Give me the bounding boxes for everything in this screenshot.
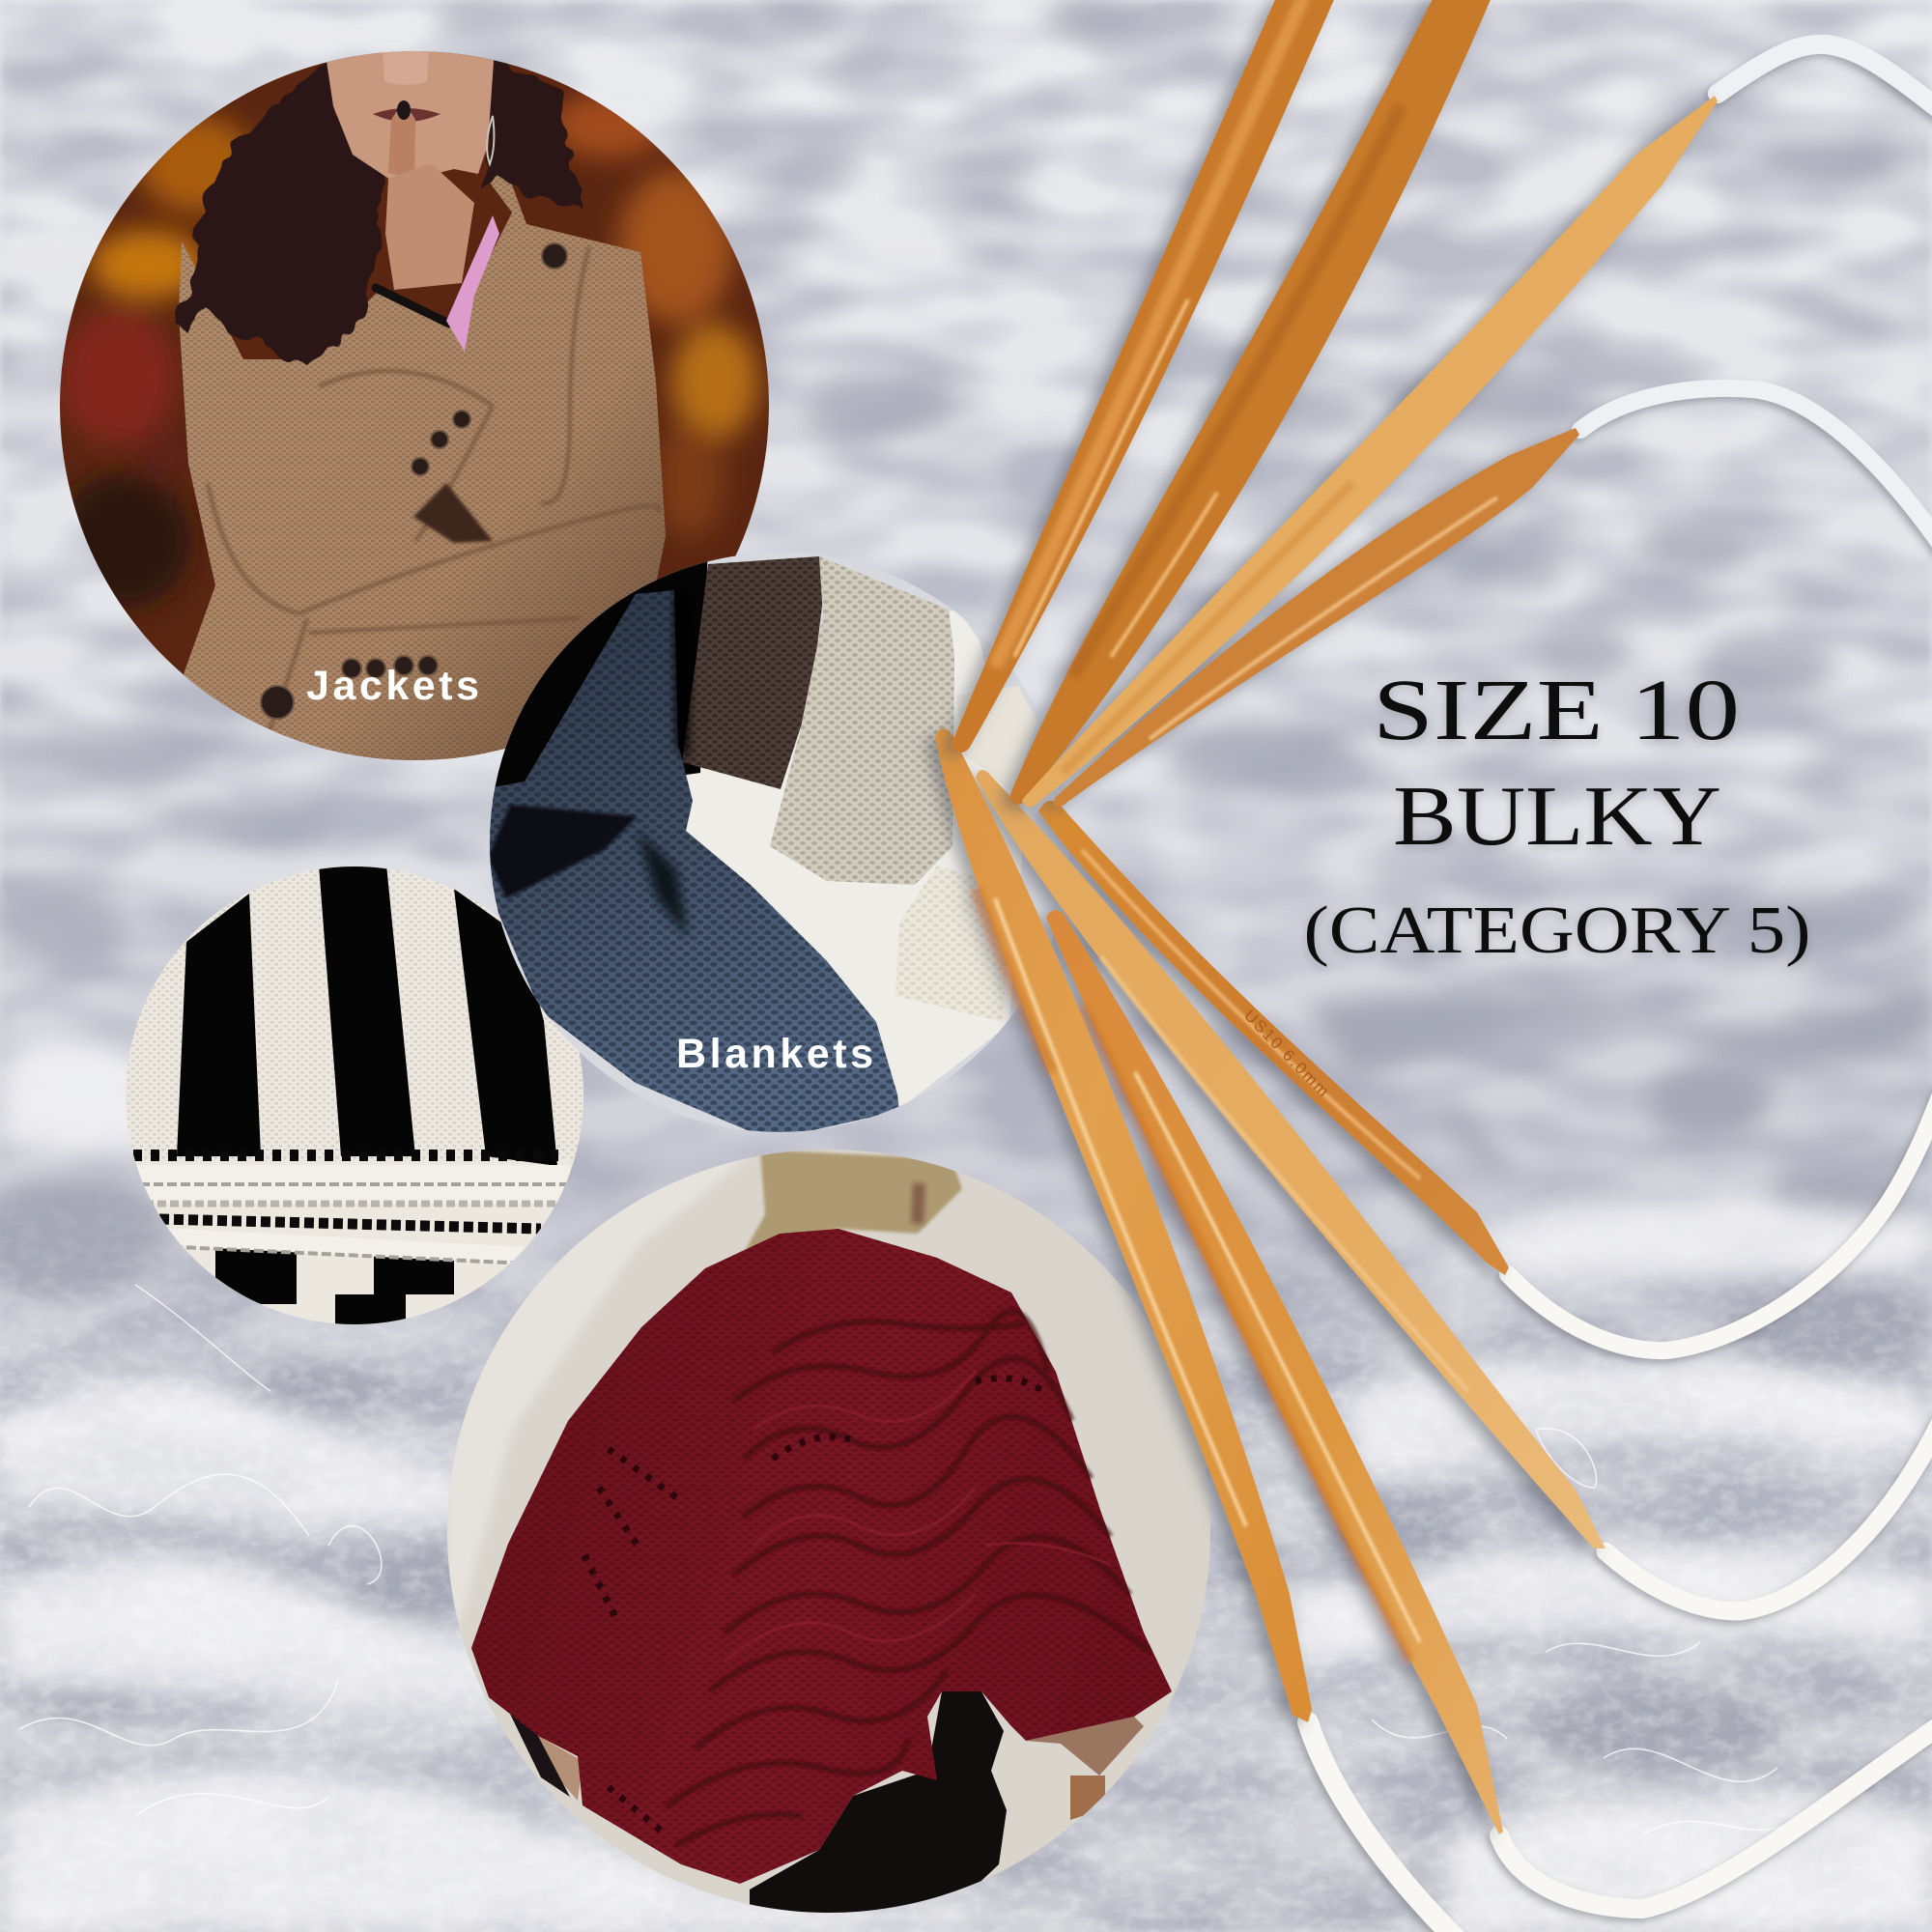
needle 8 with size marking: US10 6.0mm [1240,1007,1334,1102]
photo circle: shawl [444,1145,1217,1922]
white floor [657,609,1024,1140]
label: Jackets: Jackets [306,663,479,709]
face and hand [325,48,495,290]
needle cables [1308,44,1932,1932]
upper needles [952,0,1718,808]
cable: needle 4 [1580,388,1932,546]
title: size and weight: SIZE 10 [1373,663,1740,758]
cable: needle 5 [1308,1722,1459,1932]
photo circle: blankets [483,541,1082,1140]
title: size and weight [1304,663,1810,968]
cable: needle 8 [1508,1092,1932,1350]
red shawl [471,1229,1172,1884]
needle 7 [976,770,1605,1548]
hair [173,58,585,370]
needle 8 with size marking [1038,801,1509,1275]
ear and neck [911,1183,925,1225]
photo circle: jacket [56,48,773,773]
coat buttons [261,243,567,719]
needle 5 [935,728,1312,1722]
brown pillow [682,556,823,789]
hair [745,1150,962,1251]
cable: needle 6 [1499,1724,1932,1909]
needle 2 [1009,0,1492,805]
needle 1 [952,0,1336,753]
needle 3 [1022,96,1718,808]
title: size and weight: BULKY [1393,770,1721,864]
needle 6 [1046,910,1503,1834]
coat [164,169,666,773]
title: size and weight: (CATEGORY 5) [1304,894,1810,968]
figure pants, arm and box [508,1691,1144,1922]
black stripes [177,865,557,1325]
photo circle: stripes [121,860,594,1333]
lower needles [935,728,1605,1834]
beige pillow [770,556,954,885]
black shadow area [483,541,708,802]
blue blanket [483,590,899,1140]
label: Blankets: Blankets [676,1031,873,1077]
autumn field backdrop [56,93,758,609]
cream pillow [895,866,1007,1022]
crochet border bands [130,1155,570,1264]
cable: needle 3 [1718,44,1932,111]
back cream pillow [956,686,1037,793]
cable: needle 7 [1605,1420,1932,1611]
needle 4 [1054,428,1579,807]
